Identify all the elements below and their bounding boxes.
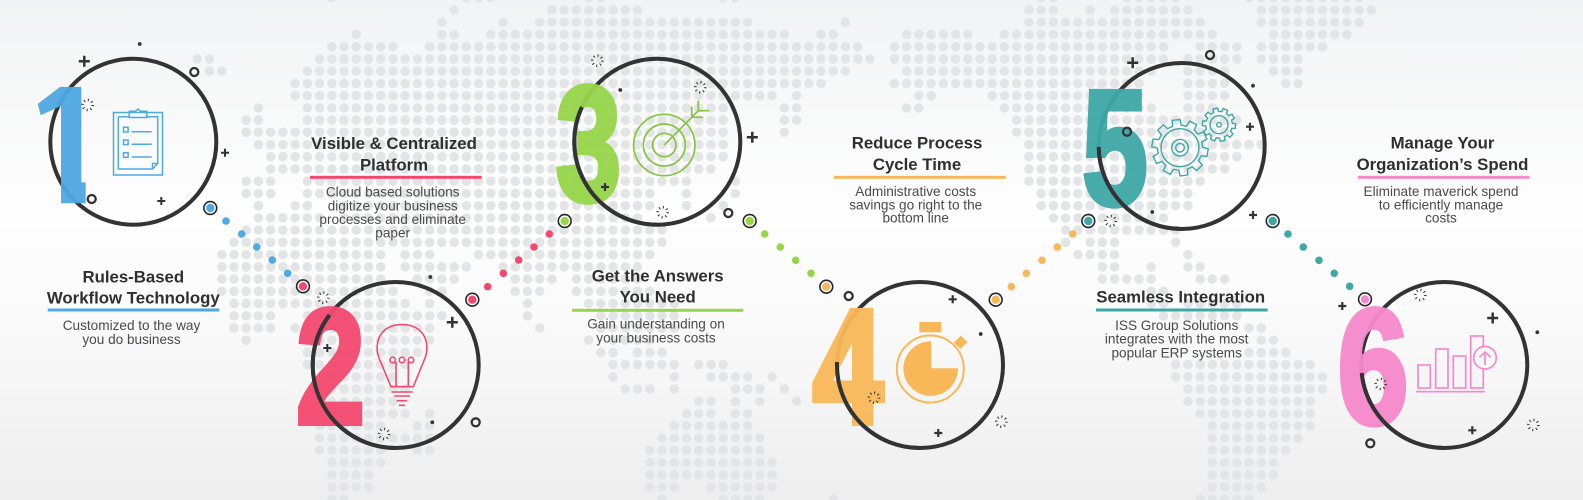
heading 1: Rules-Based: [82, 268, 184, 287]
connector: step 2 to 3: [297, 230, 553, 306]
decorations 6: [1338, 290, 1539, 447]
underline 5: [1096, 308, 1268, 312]
body 2: paper: [375, 226, 411, 241]
icon: rising bar chart: [1416, 336, 1496, 392]
ring overlay 4: [837, 362, 920, 448]
icon: target: [634, 101, 709, 176]
ring 5: [1099, 63, 1265, 229]
ring 2: [313, 282, 479, 448]
body 5: integrates with the most: [1105, 331, 1249, 346]
numeral 6: 6: [1338, 276, 1408, 458]
ring 6: [1361, 282, 1527, 448]
ring overlay 3: [574, 107, 657, 225]
decorations 5: [1106, 51, 1257, 226]
numeral 4: 4: [813, 276, 883, 458]
underline 4: [834, 176, 1006, 179]
panel: step 2: [296, 134, 482, 458]
decorations 2: [318, 275, 480, 439]
body 2: digitize your business: [328, 199, 458, 214]
heading 2: Platform: [360, 156, 428, 175]
decorations 1: [79, 42, 229, 205]
body 1: you do business: [82, 332, 181, 347]
underline 2: [310, 176, 482, 179]
body 3: Gain understanding on: [587, 317, 725, 332]
ring overlay 2: [313, 315, 396, 448]
icon: clipboard: [114, 109, 162, 175]
decorations 3: [592, 56, 758, 217]
connector: step 5 to 6: [1082, 215, 1353, 290]
numeral 1: 1: [27, 55, 105, 238]
body 1: Customized to the way: [63, 318, 200, 333]
body 6: costs: [1425, 211, 1457, 226]
body 5: popular ERP systems: [1111, 345, 1242, 360]
numeral 3: 3: [556, 53, 621, 236]
panel: step 4: [813, 133, 1006, 458]
panel: step 6: [1338, 133, 1539, 458]
dotted world map: [197, 0, 1373, 499]
numeral 2: 2: [296, 276, 365, 458]
numeral 5: 5: [1082, 57, 1148, 240]
heading 4: Cycle Time: [873, 155, 961, 174]
icon: stopwatch: [897, 322, 967, 402]
panel: step 1: [27, 42, 229, 347]
body 2: Cloud based solutions: [326, 185, 460, 200]
icon: light bulb: [377, 324, 427, 405]
connector: step 4 to 5: [820, 230, 1076, 306]
underline 1: [48, 308, 219, 312]
connector: step 3 to 4: [558, 215, 815, 277]
ring 4: [837, 282, 1003, 448]
heading 6: Manage Your: [1391, 133, 1495, 152]
ring overlay 5: [1099, 147, 1182, 229]
body 4: bottom line: [882, 211, 949, 226]
ring 1: [50, 59, 216, 225]
heading 2: Visible & Centralized: [311, 134, 477, 153]
heading 3: You Need: [620, 287, 696, 306]
connector: step 1 to 2: [204, 202, 292, 277]
connector end node: step 6: [1359, 293, 1371, 306]
heading 5: Seamless Integration: [1096, 288, 1265, 307]
heading 6: Organization’s Spend: [1357, 155, 1528, 174]
body 3: your business costs: [596, 330, 716, 345]
heading 3: Get the Answers: [592, 266, 724, 285]
panel: step 5: [1082, 51, 1268, 360]
ring 3: [574, 59, 740, 225]
heading 4: Reduce Process: [852, 133, 982, 152]
body 6: to efficiently manage: [1379, 197, 1503, 212]
icon: gears: [1148, 107, 1237, 180]
underline 3: [572, 309, 743, 312]
underline 6: [1358, 176, 1530, 179]
body 6: Eliminate maverick spend: [1364, 184, 1518, 199]
body 4: savings go right to the: [849, 197, 982, 212]
body 2: processes and eliminate: [319, 212, 466, 227]
heading 1: Workflow Technology: [47, 288, 220, 307]
body 5: ISS Group Solutions: [1115, 318, 1238, 333]
decorations 4: [845, 292, 1006, 437]
ring overlay 6: [1362, 373, 1444, 448]
panel: step 3: [556, 53, 758, 345]
body 4: Administrative costs: [855, 184, 976, 199]
